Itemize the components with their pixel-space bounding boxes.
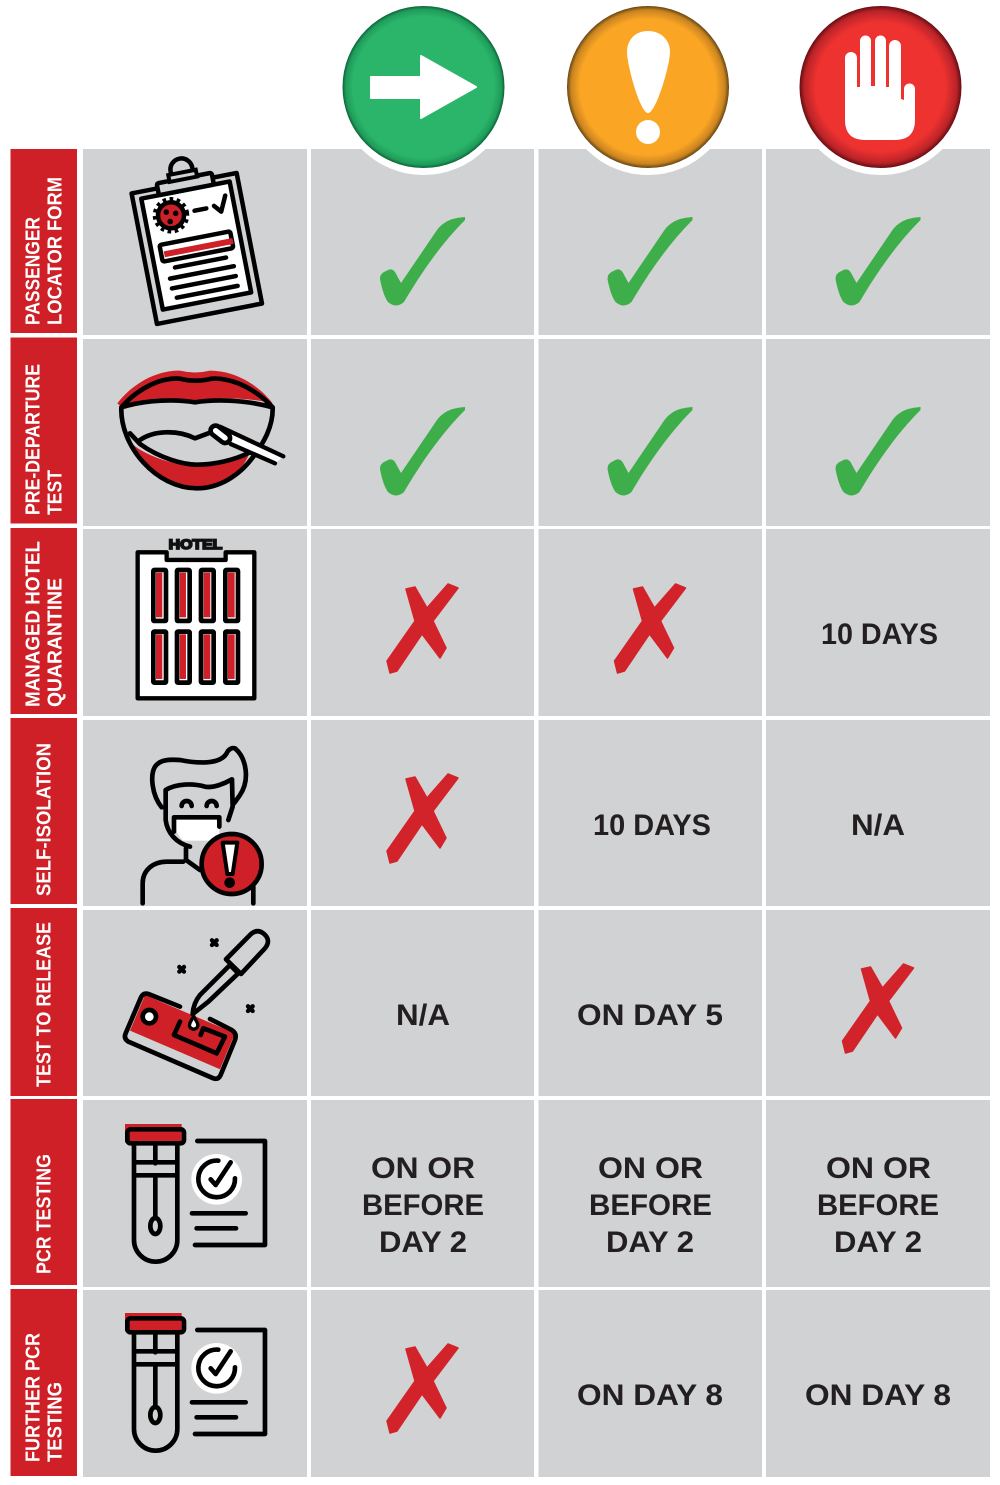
header: red stop signal bbox=[794, 1, 968, 175]
row label: TEST TO RELEASE bbox=[34, 922, 56, 1087]
value: red category: ON OR bbox=[826, 1152, 931, 1185]
row label: LOCATOR FORM bbox=[44, 177, 66, 325]
icon: test tube and report bbox=[125, 1313, 265, 1451]
row: passenger locator form bbox=[10, 148, 990, 335]
icon: clipboard bbox=[127, 148, 262, 324]
row: managed hotel quarantine bbox=[10, 528, 990, 716]
row label: SELF-ISOLATION bbox=[34, 743, 56, 896]
row label: PCR TESTING bbox=[34, 1154, 56, 1274]
icon: masked person with alert bbox=[143, 748, 262, 903]
value: amber category: BEFORE bbox=[589, 1189, 712, 1222]
icon: lateral flow test with dropper bbox=[125, 931, 268, 1079]
icon: arrow bbox=[371, 56, 476, 118]
value: red category bbox=[817, 1152, 939, 1259]
row label bbox=[10, 1289, 77, 1476]
row label: TEST bbox=[44, 470, 66, 515]
value: green category bbox=[362, 1152, 484, 1259]
row: further pcr testing bbox=[10, 1289, 990, 1477]
row label: FURTHER PCR bbox=[22, 1333, 44, 1462]
icon: exclamation mark bbox=[627, 31, 670, 144]
icon: test tube and report bbox=[125, 1124, 265, 1262]
value: amber category: ON OR bbox=[598, 1152, 703, 1185]
value: amber category bbox=[589, 1152, 712, 1259]
row label: TESTING bbox=[44, 1382, 66, 1462]
icon: mouth swab bbox=[117, 371, 283, 488]
row label bbox=[10, 718, 77, 904]
row label bbox=[10, 338, 77, 524]
row label: MANAGED HOTEL bbox=[22, 541, 44, 707]
row label bbox=[10, 149, 77, 333]
value: red category: ON DAY 8 bbox=[805, 1379, 951, 1412]
check: amber category bbox=[608, 217, 692, 306]
value: green category: N/A bbox=[396, 999, 450, 1032]
value: amber category: DAY 2 bbox=[606, 1226, 694, 1259]
check: red category bbox=[836, 407, 920, 496]
cross: green category bbox=[387, 774, 458, 863]
icon: hotel: HOTEL bbox=[169, 536, 223, 552]
cross: red category bbox=[842, 964, 914, 1053]
cross: amber category bbox=[614, 584, 686, 673]
icon: raised hand bbox=[845, 36, 915, 140]
header: amber caution signal bbox=[561, 1, 735, 175]
check: green category bbox=[380, 407, 465, 496]
row: self-isolation bbox=[10, 718, 990, 906]
value: red category: DAY 2 bbox=[834, 1226, 922, 1259]
row: pre-departure test bbox=[10, 338, 990, 526]
value: green category: DAY 2 bbox=[379, 1226, 467, 1259]
check: red category bbox=[836, 217, 920, 306]
row: pcr testing bbox=[10, 1099, 990, 1287]
row label: PRE-DEPARTURE bbox=[22, 364, 44, 515]
row label bbox=[10, 528, 77, 714]
value: amber category: ON DAY 5 bbox=[577, 999, 723, 1032]
value: amber category: 10 DAYS bbox=[593, 809, 711, 842]
row label bbox=[10, 908, 77, 1096]
header: green go signal bbox=[336, 1, 510, 175]
row label: QUARANTINE bbox=[44, 578, 66, 707]
row label: PASSENGER bbox=[22, 217, 44, 325]
value: red category: 10 DAYS bbox=[821, 618, 938, 651]
value: red category: N/A bbox=[851, 809, 905, 842]
row label bbox=[10, 1099, 77, 1285]
icon: hotel bbox=[138, 536, 254, 698]
cross: green category bbox=[387, 1344, 458, 1433]
row: test to release bbox=[10, 908, 990, 1096]
check: amber category bbox=[608, 407, 692, 496]
value: red category: BEFORE bbox=[817, 1189, 939, 1222]
value: green category: BEFORE bbox=[362, 1189, 484, 1222]
value: amber category: ON DAY 8 bbox=[577, 1379, 723, 1412]
check: green category bbox=[380, 217, 465, 306]
cross: green category bbox=[387, 584, 458, 673]
value: green category: ON OR bbox=[371, 1152, 475, 1185]
